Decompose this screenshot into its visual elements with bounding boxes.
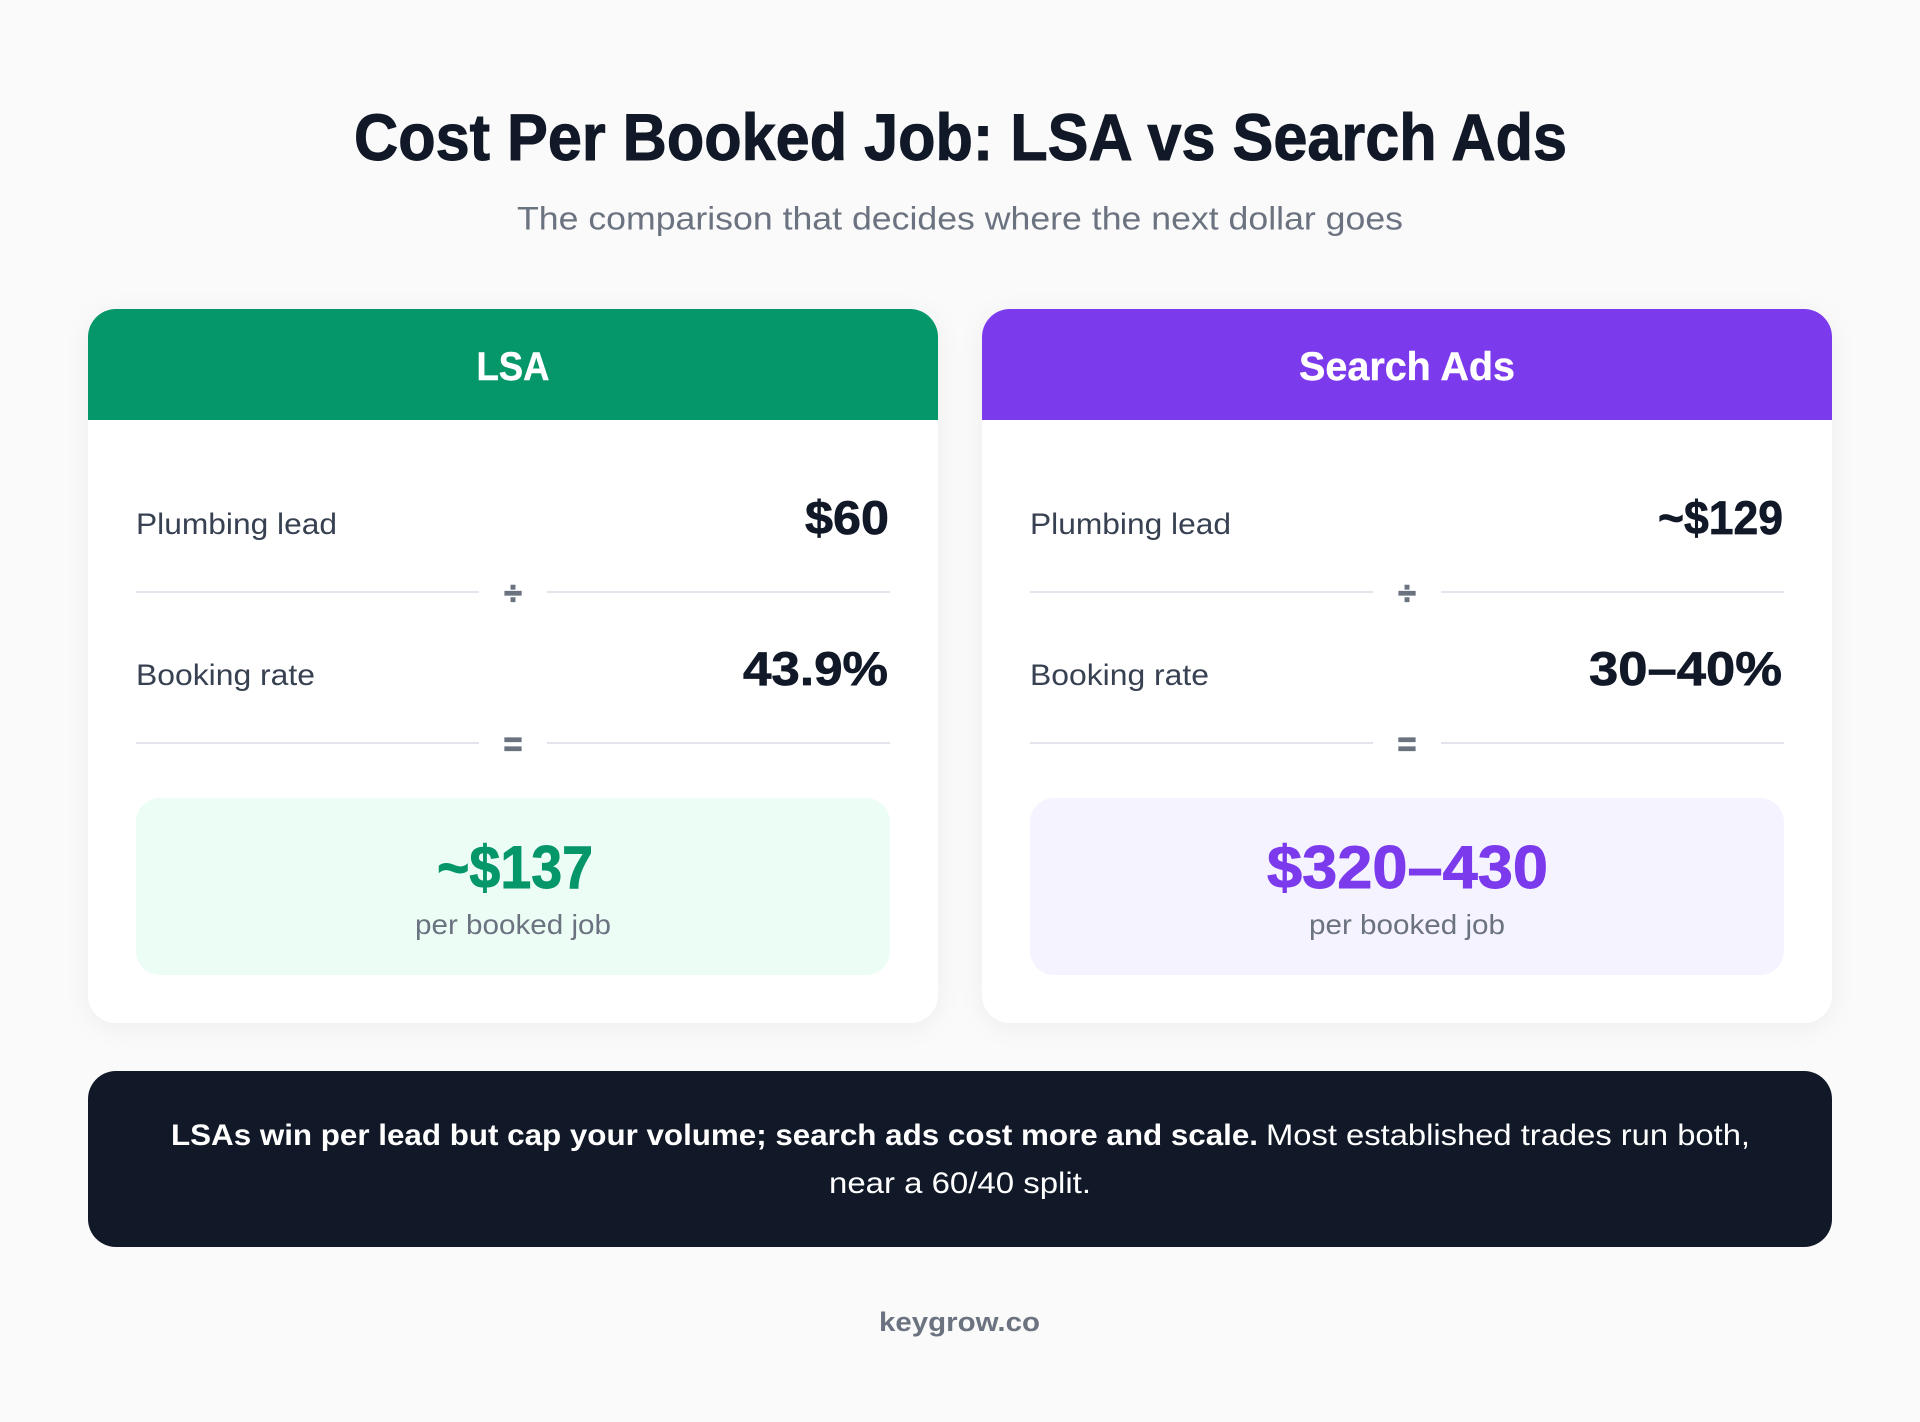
callout: takeaway: LSAs win per lead but cap your volume; search ads cost more and scale. <box>171 1119 1258 1152</box>
card header: LSA: LSA <box>476 345 550 389</box>
card header: Search Ads: Search Ads <box>1299 345 1515 389</box>
card background <box>88 309 938 1023</box>
callout: takeaway <box>88 1071 1832 1247</box>
callout: takeaway: near a 60/40 split. <box>829 1167 1091 1200</box>
divider: divide: ÷ <box>1398 575 1416 611</box>
subtitle: The comparison that decides where the next dollar goes <box>517 200 1403 236</box>
row: plumbing lead: Plumbing lead <box>1030 508 1231 541</box>
card background <box>982 309 1832 1023</box>
title: Cost Per Booked Job: LSA vs Search Ads <box>354 100 1567 174</box>
row: booking rate: 43.9% <box>743 642 888 695</box>
row: booking rate: Booking rate <box>136 659 315 692</box>
panel: LSA <box>88 309 938 1023</box>
row: plumbing lead <box>136 491 889 544</box>
result: LSA cost per booked job: ~$137 <box>437 834 593 901</box>
row: plumbing lead: $60 <box>805 491 889 544</box>
row: booking rate: 30–40% <box>1589 642 1782 695</box>
result: Search Ads cost per booked job: per booked job <box>1309 909 1505 940</box>
card header: Search Ads <box>982 309 1832 420</box>
divider: equals: = <box>1398 726 1416 762</box>
divider: equals: = <box>504 726 522 762</box>
result: LSA cost per booked job: per booked job <box>415 909 611 940</box>
row: plumbing lead: ~$129 <box>1658 491 1783 544</box>
result: Search Ads cost per booked job <box>1030 798 1784 975</box>
divider: divide: ÷ <box>504 575 522 611</box>
row: booking rate <box>1030 642 1782 695</box>
callout: takeaway: Most established trades run both, <box>1266 1119 1750 1152</box>
row: booking rate <box>136 642 888 695</box>
result: LSA cost per booked job <box>136 798 890 975</box>
panel: Search Ads <box>982 309 1832 1023</box>
result: Search Ads cost per booked job: $320–430 <box>1267 834 1548 901</box>
footer: brand: keygrow.co <box>879 1307 1040 1337</box>
row: plumbing lead <box>1030 491 1783 544</box>
row: booking rate: Booking rate <box>1030 659 1209 692</box>
row: plumbing lead: Plumbing lead <box>136 508 337 541</box>
card header: LSA <box>88 309 938 420</box>
